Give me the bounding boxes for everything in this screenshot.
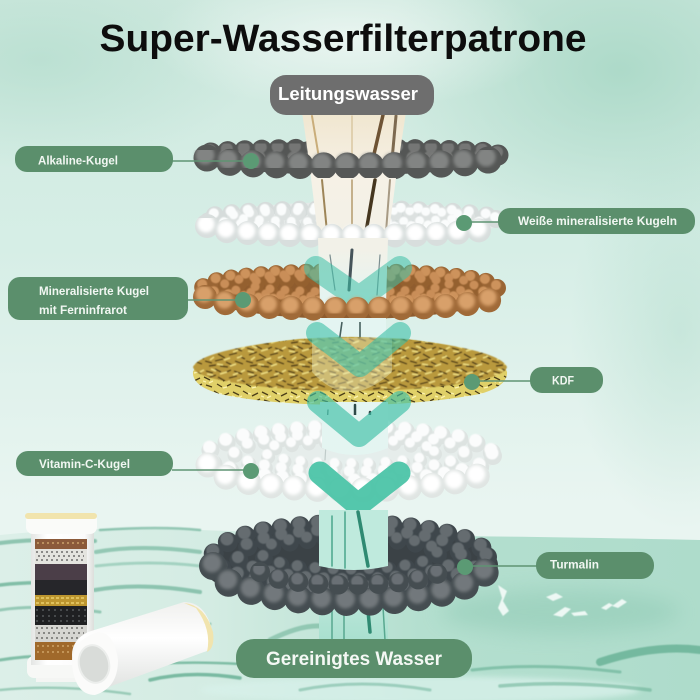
label: Turmalin: Turmalin [550, 558, 599, 572]
title: Super-Wasserfilterpatrone [100, 18, 586, 60]
label: Mineralisierte Kugel mit Ferninfrarot: Mineralisierte Kugel [39, 284, 149, 298]
disc: weiße mineralisierte Kugeln [200, 178, 500, 242]
chevron 1 [316, 268, 400, 298]
label: Leitungswasser [270, 75, 434, 115]
label: Alkaline-Kugel: Alkaline-Kugel [38, 154, 118, 168]
column segment: upper [311, 178, 396, 238]
label: Alkaline-Kugel [15, 146, 259, 172]
label: Gereinigtes Wasser [236, 639, 472, 678]
chevron arrows [317, 333, 400, 505]
label: Mineralisierte Kugel mit Ferninfrarot: mit Ferninfrarot [39, 303, 127, 317]
column segment: bottom [319, 590, 388, 640]
column segment: below KDF [320, 402, 388, 470]
disc: Turmalin [202, 510, 498, 640]
label: Weiße mineralisierte Kugeln [456, 208, 695, 234]
filter cartridge: lying [72, 602, 213, 695]
label: Vitamin-C-Kugel: Vitamin-C-Kugel [39, 457, 130, 471]
label: Weiße mineralisierte Kugeln: Weiße mineralisierte Kugeln [518, 214, 677, 228]
label: Gereinigtes Wasser: Gereinigtes Wasser [266, 649, 443, 670]
disc: Vitamin-C-Kugel [205, 415, 495, 495]
disc: Mineralisierte Kugel mit Ferninfrarot [198, 238, 502, 319]
label: Turmalin [457, 552, 654, 579]
water surface [0, 528, 700, 700]
column segment: middle [318, 238, 388, 305]
label: KDF [464, 367, 603, 393]
disc: KDF [193, 337, 507, 405]
disc: Alkaline-Kugel [201, 112, 498, 178]
label: Mineralisierte Kugel mit Ferninfrarot [8, 277, 251, 320]
filter cartridge: upright [25, 513, 97, 682]
column segment: top [302, 112, 406, 178]
label: Leitungswasser: Leitungswasser [278, 83, 418, 104]
column segment: through tourmaline disc [319, 510, 388, 570]
label: KDF: KDF [552, 374, 574, 388]
column segment: lower centre [322, 415, 388, 455]
label: Vitamin-C-Kugel [16, 451, 259, 479]
column segment: below orange disc [320, 318, 386, 350]
